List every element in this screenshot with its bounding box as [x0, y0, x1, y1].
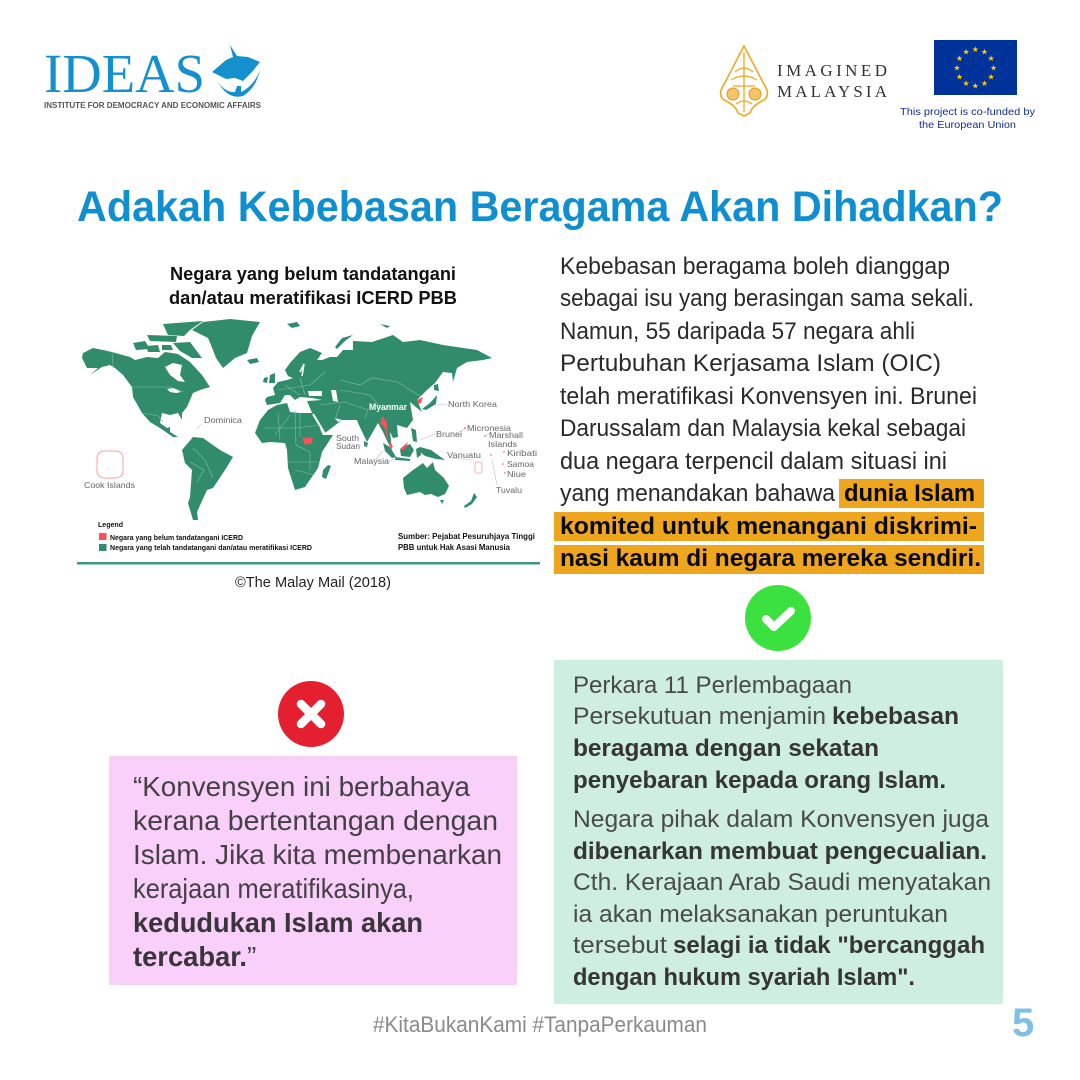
logo: Imagined Malaysia: IMAGINED: [777, 61, 887, 80]
map: country labels: Sudan: [336, 441, 360, 451]
panel: supporting argument: ia akan melaksanakan peruntukan: [573, 901, 948, 928]
text block: intro paragraph: yang menandakan bahawa: [560, 480, 836, 507]
panel: opposing quote: kerana bertentangan dengan: [133, 805, 498, 836]
map: country labels: Vanuatu: [447, 450, 481, 460]
map: country labels: [84, 399, 537, 495]
title: Adakah Kebebasan Beragama Akan Dihadkan?: [77, 183, 1003, 231]
panel: supporting argument: selagi ia tidak "bercanggah: [673, 932, 985, 959]
map: country labels: Brunei: [436, 429, 462, 439]
panel: supporting argument: dibenarkan membuat pengecualian.: [573, 838, 987, 865]
logo: European Union flag: ★: [972, 45, 979, 54]
panel: supporting argument: tersebut: [573, 932, 667, 959]
map: country labels: Myanmar: [369, 402, 407, 412]
map legend: Negara yang belum tandatangani ICERD: [110, 535, 243, 542]
panel: supporting argument: penyebaran kepada orang Islam.: [573, 767, 946, 794]
text block: intro paragraph: Darussalam dan Malaysia kekal sebagai: [560, 415, 966, 442]
map legend: [98, 522, 312, 552]
map: country labels: Cook Islands: [84, 480, 135, 490]
map: inland seas and borders: [112, 352, 420, 482]
text block: intro paragraph: [554, 253, 984, 574]
panel: supporting argument: Negara pihak dalam Konvensyen juga: [573, 806, 990, 833]
panel: supporting argument: kebebasan: [832, 703, 959, 730]
map credit: ©The Malay Mail (2018): [235, 574, 391, 591]
map: country labels: Tuvalu: [496, 485, 522, 495]
logo: Imagined Malaysia: [721, 46, 888, 116]
map: country labels: Samoa: [507, 459, 534, 469]
logo: IDEAS: INSTITUTE FOR DEMOCRACY AND ECONOMIC AFFAIRS: [44, 101, 262, 110]
panel: supporting argument: beragama dengan sekatan: [573, 735, 879, 762]
logo: European Union flag: This project is co-funded by: [900, 106, 1036, 118]
panel: opposing quote: [109, 756, 517, 985]
panel: opposing quote: Islam. Jika kita membenarkan: [133, 839, 502, 870]
map: country labels: Dominica: [204, 415, 242, 425]
logo: European Union flag: ★: [956, 72, 963, 81]
logo: European Union flag: the European Union: [919, 119, 1016, 131]
logo: European Union flag: [900, 40, 1036, 131]
panel: supporting argument: Cth. Kerajaan Arab Saudi menyatakan: [573, 869, 991, 896]
logo: IDEAS: IDEAS: [44, 43, 205, 104]
map: land masses: [82, 319, 492, 520]
chart title: Negara yang belum tandatangani: [170, 263, 456, 284]
panel: opposing quote: kerajaan meratifikasinya,: [133, 873, 414, 904]
icon: red cross: [278, 681, 344, 747]
logo: European Union flag: ★: [963, 79, 970, 88]
logo: European Union flag: ★: [972, 82, 979, 91]
text block: intro paragraph: telah meratifikasi Konvensyen ini. Brunei: [560, 383, 977, 410]
panel: opposing quote: tercabar.: [133, 941, 247, 972]
map: country labels: Malaysia: [354, 456, 389, 466]
map: country labels: Niue: [507, 469, 526, 479]
map: highlighted countries: [302, 397, 423, 451]
map legend: Legend: [98, 522, 123, 529]
text block: intro paragraph: Pertubuhan Kerjasama Islam (OIC): [560, 350, 941, 377]
panel: supporting argument: dengan hukum syariah Islam".: [573, 964, 915, 991]
page number: 5: [1012, 1001, 1034, 1045]
chart title: [169, 263, 457, 308]
map: country labels: Micronesia: [467, 423, 511, 433]
logo: European Union flag: ★: [981, 79, 988, 88]
text block: intro paragraph: Kebebasan beragama boleh dianggap: [560, 253, 950, 280]
text block: intro paragraph: dua negara terpencil dalam situasi ini: [560, 448, 947, 475]
icon: green check: [745, 585, 811, 651]
map: country labels: Kiribati: [507, 448, 537, 458]
chart title: dan/atau meratifikasi ICERD PBB: [169, 287, 457, 308]
logo: IDEAS: [44, 43, 262, 110]
hashtags: #KitaBukanKami #TanpaPerkauman: [373, 1012, 707, 1037]
map source note: PBB untuk Hak Asasi Manusia: [398, 543, 511, 552]
panel: supporting argument: [554, 660, 1003, 1004]
logo: European Union flag: ★: [988, 72, 995, 81]
text block: intro paragraph: sebagai isu yang berasingan sama sekali.: [560, 285, 974, 312]
map: country labels: Marshall: [489, 430, 523, 440]
panel: opposing quote: “Konvensyen ini berbahaya: [133, 771, 470, 802]
panel: supporting argument: Perkara 11 Perlembagaan: [573, 672, 852, 699]
logo: Imagined Malaysia: MALAYSIA: [777, 82, 888, 101]
text block: intro paragraph: komited untuk menangani diskrimi-: [560, 513, 977, 540]
logo: European Union flag: ★: [953, 63, 961, 72]
logo: European Union flag: ★: [988, 54, 995, 63]
logo: European Union flag: ★: [990, 63, 997, 72]
text block: intro paragraph: dunia Islam: [844, 480, 975, 507]
map source note: Sumber: Pejabat Pesuruhjaya Tinggi: [398, 532, 535, 541]
panel: world map chart: [77, 263, 540, 591]
map: country labels: South: [336, 433, 359, 443]
panel: opposing quote: kedudukan Islam akan: [133, 907, 423, 938]
logo: European Union flag: ★: [981, 48, 988, 56]
panel: supporting argument: Persekutuan menjamin: [573, 703, 826, 730]
text block: intro paragraph: Namun, 55 daripada 57 negara ahli: [560, 318, 915, 345]
map: country labels: North Korea: [448, 399, 497, 409]
text block: intro paragraph: nasi kaum di negara mereka sendiri.: [560, 545, 981, 572]
panel: opposing quote: ”: [247, 941, 256, 972]
map legend: Negara yang telah tandatangani dan/atau meratifikasi ICERD: [110, 545, 312, 552]
map source note: [398, 532, 535, 552]
map: country labels: Islands: [488, 439, 517, 449]
logo: European Union flag: ★: [956, 54, 963, 63]
logo: European Union flag: ★: [963, 48, 970, 56]
